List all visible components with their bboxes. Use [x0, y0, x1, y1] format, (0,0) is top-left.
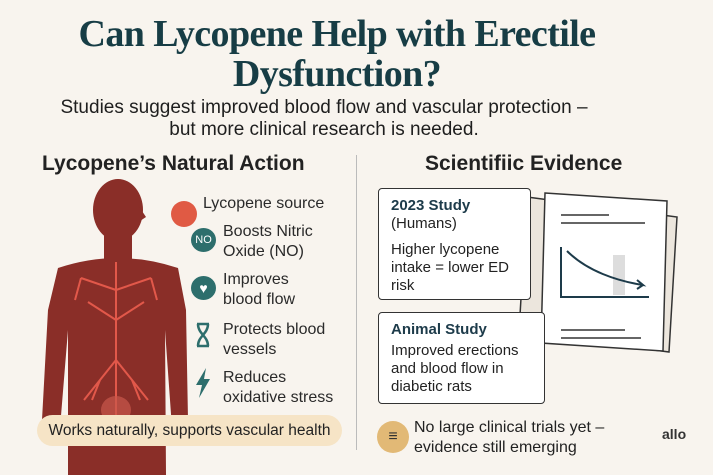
subtitle: but more clinical research is needed. [169, 119, 479, 140]
icon: dna [196, 322, 210, 348]
card: animal study [378, 312, 545, 404]
text: lycopene source: Lycopene source [203, 195, 324, 212]
icon: heart [191, 276, 216, 300]
icon: lightning [196, 368, 210, 398]
footer text: evidence still emerging [414, 439, 577, 456]
title: Dysfunction? [233, 53, 441, 95]
text: blood flow: blood flow [223, 291, 295, 308]
title: Can Lycopene Help with Erectile [79, 13, 595, 55]
card: 2023 study: 2023 Study [391, 197, 470, 214]
callout: works naturally [37, 415, 342, 446]
text: oxidative stress [223, 369, 333, 406]
icon: note [377, 421, 409, 453]
text: protects vessels [223, 321, 325, 358]
text: oxidative stress: Reduces [223, 369, 286, 386]
icon: heart: ♥ [199, 280, 208, 296]
icon: NO [191, 228, 216, 252]
title [79, 13, 595, 95]
text: nitric oxide [223, 223, 313, 260]
text: nitric oxide: Oxide (NO) [223, 243, 304, 260]
divider [356, 155, 357, 450]
card: animal study: Improved erections and blood flow in diabetic rats [391, 342, 519, 395]
text: oxidative stress: oxidative stress [223, 389, 333, 406]
icon: note: ≡ [388, 428, 398, 445]
text: nitric oxide: Boosts Nitric [223, 223, 313, 240]
heading: right: Scientifiic Evidence [425, 152, 622, 175]
illustration: body silhouette [42, 179, 188, 475]
icon: tomato [171, 201, 197, 227]
callout: works naturally: Works naturally, supports vascular health [48, 422, 330, 439]
footer text: No large clinical trials yet – [414, 419, 604, 436]
subtitle [60, 97, 588, 140]
card: 2023 study: Higher lycopene intake = lower ED risk [391, 241, 509, 294]
heading: left: Lycopene’s Natural Action [42, 152, 305, 175]
card: 2023 study: (Humans) [391, 215, 457, 232]
text: protects vessels: vessels [223, 341, 276, 358]
card: animal study: Animal Study [391, 321, 487, 338]
illustration: papers [519, 192, 678, 353]
text: blood flow [223, 271, 296, 308]
subtitle: Studies suggest improved blood flow and vascular protection – [60, 97, 588, 118]
text: blood flow: Improves [223, 271, 289, 288]
logo: allo [662, 426, 686, 442]
icon: NO: NO [195, 234, 212, 246]
card: 2023 study [378, 188, 531, 300]
footer text [414, 419, 604, 456]
text: protects vessels: Protects blood [223, 321, 325, 338]
